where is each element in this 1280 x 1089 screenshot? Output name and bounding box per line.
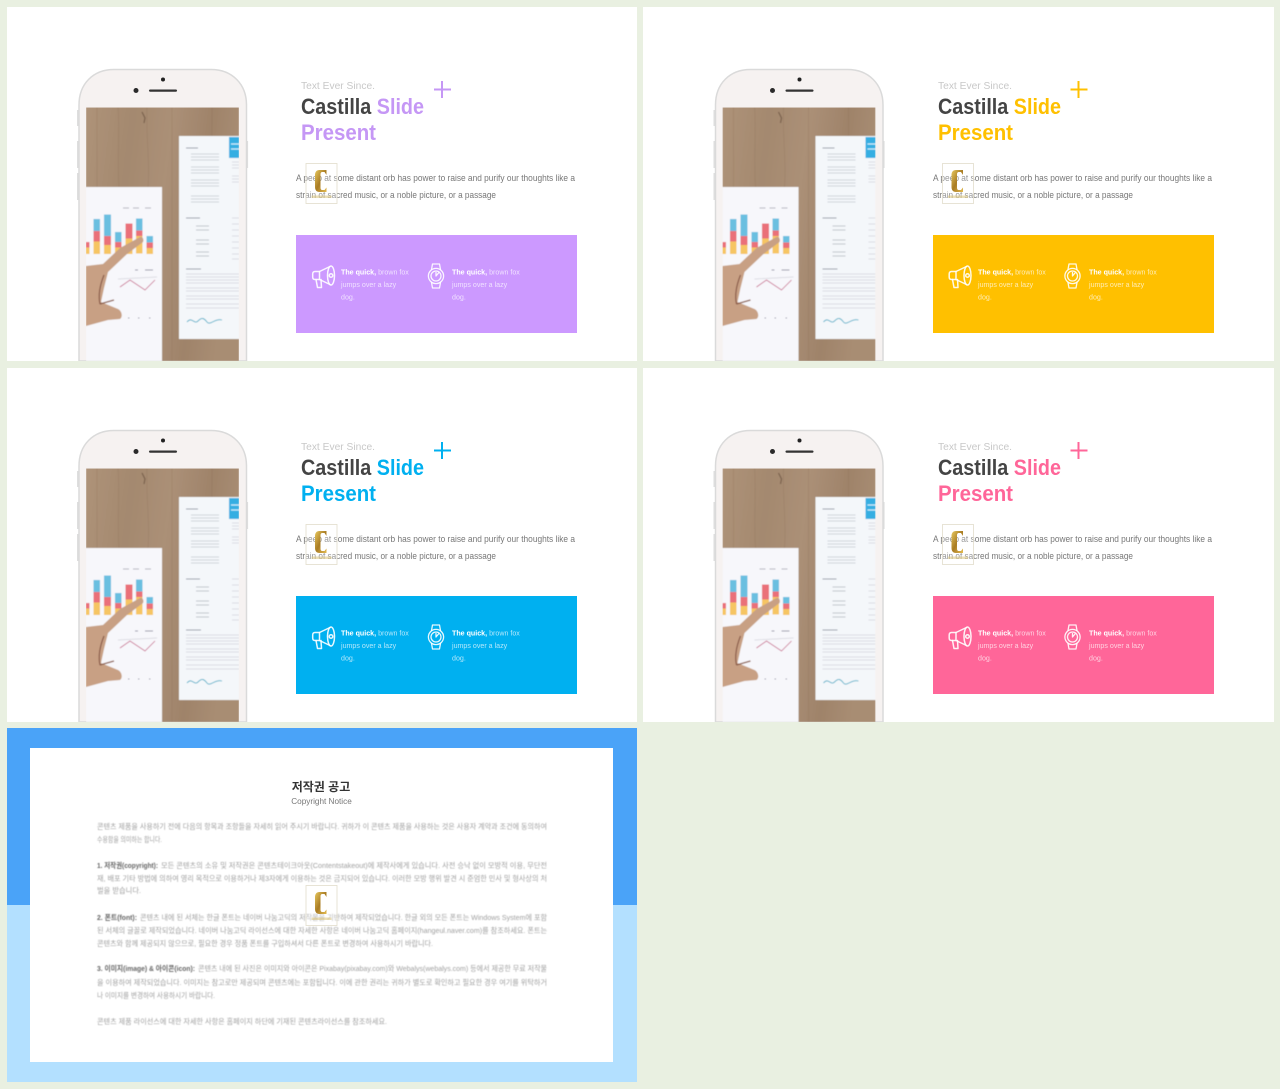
feature text one: The quick, xyxy=(341,268,376,276)
feature box xyxy=(296,235,577,333)
body text: A peep at some distant orb has power to raise and purify our thoughts like a xyxy=(296,534,575,544)
section 1: copyright: 재, 배포 기타 방법에 의하여 영리 목적으로 이용하거나 제3자에게 이용하는 것은 금지되어 있습니다. 이러한 모방 행위 발견 시 준엄한 민사 및 형사상의 처 xyxy=(97,873,547,883)
icon: megaphone xyxy=(949,627,971,648)
section 2: font: 콘텐츠와 함께 제공되지 않으므로, 필요한 경우 정품 폰트를 구입하셔서 다른 폰트로 변경하여 사용하시기 바랍니다. xyxy=(97,938,433,948)
feature text two: jumps over a lazy xyxy=(451,642,508,650)
slide title: Castilla Slide xyxy=(938,94,1061,119)
icon: megaphone xyxy=(949,266,971,288)
eyebrow text: Text Ever Since. xyxy=(301,441,375,453)
feature text two: brown fox xyxy=(487,268,520,276)
feature text one: The quick, xyxy=(341,630,376,638)
body text: A peep at some distant orb has power to raise and purify our thoughts like a xyxy=(296,173,575,183)
feature text one: brown fox xyxy=(376,268,409,276)
feature text two: brown fox xyxy=(1124,268,1157,276)
section 2: font: 2. 폰트(font): xyxy=(97,913,137,922)
feature text two: dog. xyxy=(452,654,466,662)
section 3: image and icon: 나 이미지를 변경하여 사용하시기 바랍니다. xyxy=(97,990,215,1000)
feature text two: brown fox xyxy=(487,630,520,638)
watermark logo xyxy=(306,524,337,564)
slide title: Castilla Slide xyxy=(301,455,424,480)
slide title xyxy=(301,455,424,506)
feature text one: brown fox xyxy=(1013,630,1046,638)
section 3: image and icon xyxy=(97,963,547,1000)
feature box xyxy=(933,235,1214,333)
panel: blue slide xyxy=(7,368,637,722)
watermark logo xyxy=(306,886,337,926)
section 1: copyright xyxy=(97,860,547,895)
feature text two: The quick, xyxy=(452,630,487,638)
slide title xyxy=(301,94,424,145)
panel: yellow slide xyxy=(643,7,1274,361)
phone mockup xyxy=(77,70,248,361)
icon: plus xyxy=(434,81,451,98)
body text: strain of sacred music, or a noble picture, or a passage xyxy=(933,190,1133,200)
feature text two: dog. xyxy=(1089,294,1103,302)
panel: copyright notice xyxy=(7,728,637,1082)
watermark logo xyxy=(942,164,974,204)
eyebrow text: Text Ever Since. xyxy=(301,80,375,92)
slide title: Present xyxy=(938,481,1014,506)
slide title xyxy=(938,94,1061,145)
feature text two: The quick, xyxy=(1089,630,1124,638)
feature text one: dog. xyxy=(341,654,355,662)
feature text one: jumps over a lazy xyxy=(340,281,397,289)
heading: copyright notice: 저작권 공고 xyxy=(292,779,350,794)
slide title: Present xyxy=(301,120,377,145)
section 2: font xyxy=(97,912,547,948)
feature box xyxy=(296,596,577,694)
feature text one: dog. xyxy=(341,294,355,302)
intro paragraph: 콘텐츠 제품을 사용하기 전에 다음의 항목과 조항들을 자세히 읽어 주시기 바랍니다. 귀하가 이 콘텐츠 제품을 사용하는 것은 사용자 계약과 조건에 동의하여 xyxy=(97,821,547,831)
section 1: copyright: 모든 콘텐츠의 소유 및 저작권은 콘텐츠테이크아웃(Contentstakeout)에 제작사에게 있습니다. 사전 승낙 없이 모방적 이용, 무단전 xyxy=(161,860,547,870)
icon: megaphone xyxy=(313,627,334,648)
watermark logo xyxy=(306,164,337,204)
subheading: Copyright Notice xyxy=(291,797,352,806)
slide title xyxy=(938,455,1061,506)
watermark logo xyxy=(942,524,974,564)
feature text two: brown fox xyxy=(1124,630,1157,638)
feature text two: jumps over a lazy xyxy=(1088,642,1145,650)
feature text one: The quick, xyxy=(978,630,1013,638)
body text xyxy=(933,534,1212,561)
feature text one: dog. xyxy=(978,654,992,662)
feature text one: jumps over a lazy xyxy=(977,281,1034,289)
feature text two: The quick, xyxy=(1089,268,1124,276)
body text: A peep at some distant orb has power to raise and purify our thoughts like a xyxy=(933,173,1212,183)
body text xyxy=(933,173,1212,200)
slide title: Present xyxy=(938,120,1014,145)
feature text two: The quick, xyxy=(452,268,487,276)
section 2: font: 된 서체의 글꼴로 제작되었습니다. 네이버 나눔고딕 라이선스에 대한 자세한 사항은 네이버 나눔고딕 홈페이지(hangeul.naver.com)를 참조하세요. 폰트는 xyxy=(97,925,547,935)
icon: watch xyxy=(428,625,444,649)
icon: watch xyxy=(428,264,444,288)
body text: A peep at some distant orb has power to raise and purify our thoughts like a xyxy=(933,534,1212,544)
section 3: image and icon: 콘텐츠 내에 된 사진은 이미지와 아이콘은 Pixabay(pixabay.com)와 Webalys(webalys.com) 등에서 제공한 무료 저작물 xyxy=(198,963,547,973)
feature text one: dog. xyxy=(978,294,992,302)
feature text two: dog. xyxy=(452,294,466,302)
phone mockup xyxy=(714,430,885,722)
icon: plus xyxy=(1070,442,1088,459)
feature box xyxy=(933,596,1214,694)
section 1: copyright: 벌을 받습니다. xyxy=(97,885,141,895)
section 2: font: 콘텐츠 내에 된 서체는 한글 폰트는 네이버 나눔고딕의 저작물을 기반하여 제작되었습니다. 한글 외의 모든 폰트는 Windows System에 포함 xyxy=(140,912,547,922)
feature text two: dog. xyxy=(1089,654,1103,662)
eyebrow text: Text Ever Since. xyxy=(938,80,1012,92)
body text xyxy=(296,173,575,200)
feature text one: brown fox xyxy=(376,630,409,638)
panel: purple slide xyxy=(7,7,637,361)
icon: watch xyxy=(1065,625,1080,649)
section 3: image and icon: 3. 이미지(image) & 아이콘(icon): xyxy=(97,963,195,973)
feature text two: jumps over a lazy xyxy=(1088,281,1145,289)
section 3: image and icon: 을 이용하여 제작되었습니다. 이미지는 참고로만 제공되며 콘텐츠에는 포함됩니다. 이에 관한 권리는 귀하가 별도로 확인하고 필요한 경우 여기를 위탁하거 xyxy=(97,977,547,987)
feature text two: jumps over a lazy xyxy=(451,281,508,289)
body text: strain of sacred music, or a noble picture, or a passage xyxy=(933,551,1133,561)
intro paragraph: 수용함을 의미하는 합니다. xyxy=(97,834,162,844)
icon: megaphone xyxy=(313,266,334,288)
slide title: Present xyxy=(301,481,377,506)
body text: strain of sacred music, or a noble picture, or a passage xyxy=(296,190,496,200)
body text: strain of sacred music, or a noble picture, or a passage xyxy=(296,551,496,561)
feature text one: jumps over a lazy xyxy=(340,642,397,650)
icon: watch xyxy=(1065,264,1080,288)
eyebrow text: Text Ever Since. xyxy=(938,441,1012,453)
closing note: 콘텐츠 제품 라이선스에 대한 자세한 사항은 홈페이지 하단에 기재된 콘텐츠라이선스를 참조하세요. xyxy=(97,1016,387,1026)
body text xyxy=(296,534,575,561)
section 1: copyright: 1. 저작권(copyright): xyxy=(97,860,158,870)
feature text one: brown fox xyxy=(1013,268,1046,276)
feature text one: The quick, xyxy=(978,268,1013,276)
intro paragraph xyxy=(97,821,547,844)
panel: pink slide xyxy=(643,368,1274,722)
phone mockup xyxy=(77,430,248,722)
icon: plus xyxy=(1070,81,1088,98)
feature text one: jumps over a lazy xyxy=(977,642,1034,650)
icon: plus xyxy=(434,442,451,459)
slide title: Castilla Slide xyxy=(938,455,1061,480)
phone mockup xyxy=(714,70,885,361)
slide title: Castilla Slide xyxy=(301,94,424,119)
